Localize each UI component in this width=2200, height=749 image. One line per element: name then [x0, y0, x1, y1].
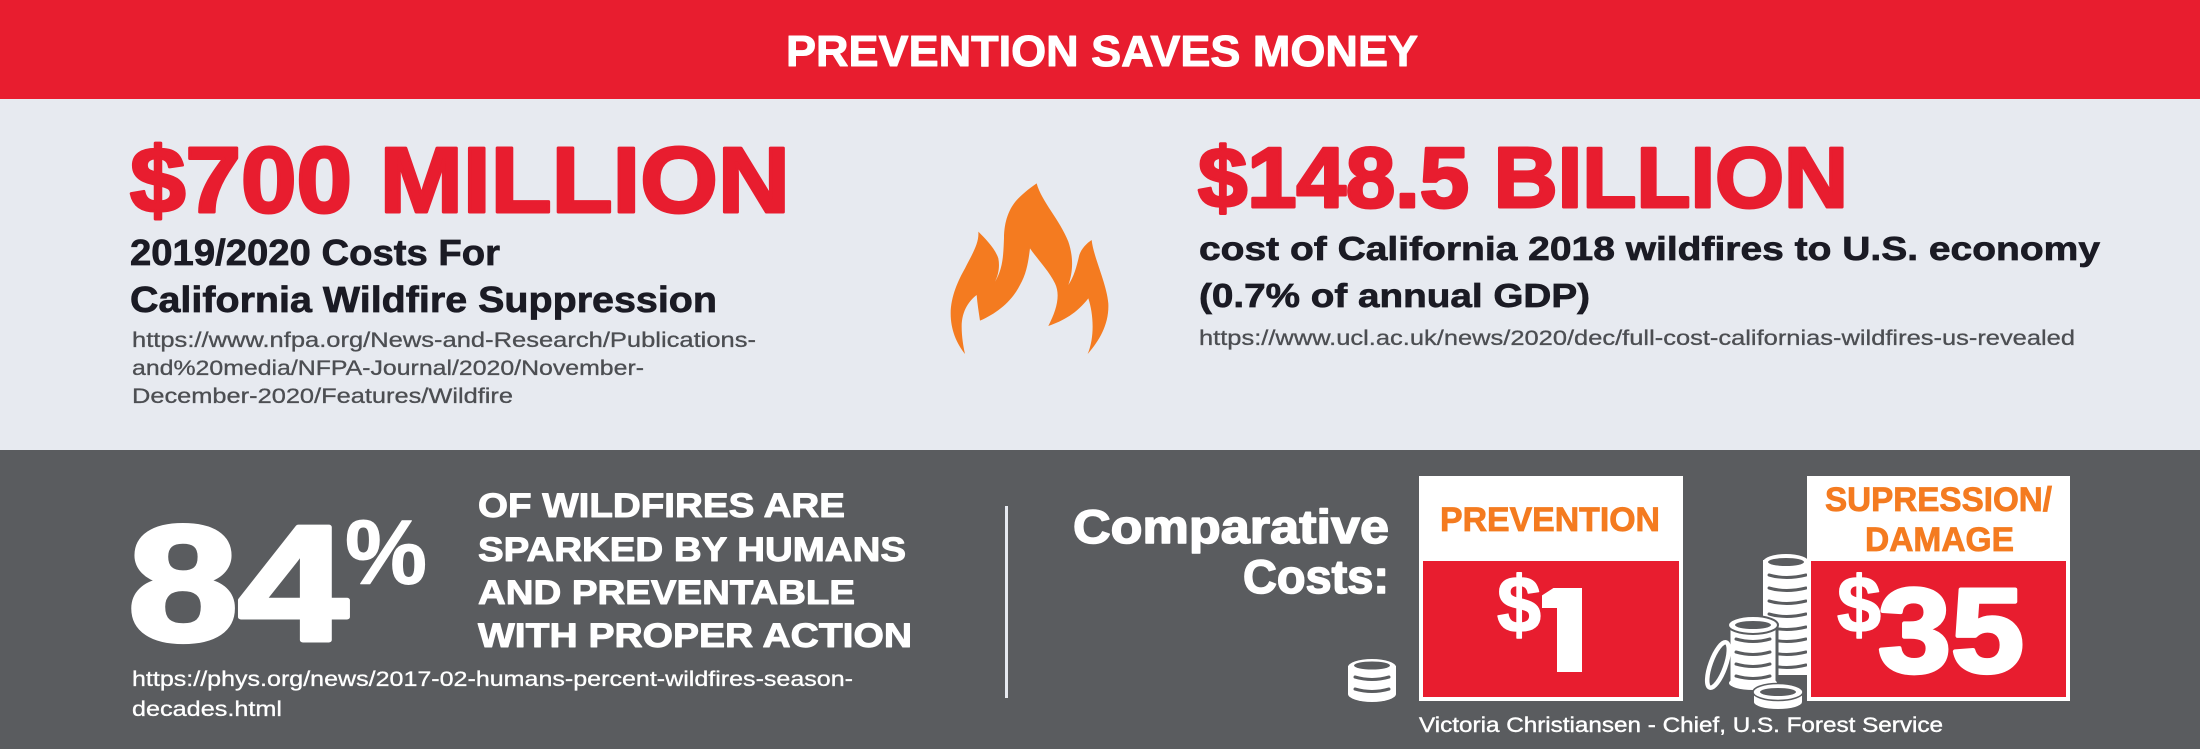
heading: economic cost [1199, 230, 2101, 314]
text: wildfires sparked by humans: WITH PROPER ACTION [478, 617, 912, 655]
icon: small coin stack [1348, 659, 1396, 702]
medium stack [1728, 616, 1778, 690]
attribution: Victoria Christiansen - Chief, U.S. Forest Service [1419, 714, 1943, 737]
stat: $148.5 billion: $148.5 BILLION [1198, 131, 1848, 226]
heading: economic cost: (0.7% of annual GDP) [1199, 277, 1590, 314]
tilted coin [1703, 640, 1733, 690]
source link: NFPA: and%20media/NFPA-Journal/2020/November- [132, 357, 644, 380]
panel: economic cost [1198, 131, 2101, 350]
heading: suppression costs: 2019/2020 Costs For [130, 232, 500, 273]
panel: dark background [0, 450, 2200, 749]
source link: NFPA [132, 329, 756, 408]
source link: phys.org: https://phys.org/news/2017-02-humans-percent-wildfires-season- [132, 668, 853, 691]
text: wildfires sparked by humans: SPARKED BY HUMANS [478, 531, 906, 569]
icon: flame [951, 183, 1108, 354]
card: suppression and damage [1807, 476, 2070, 701]
heading: comparative costs [1073, 500, 1389, 603]
panel: light background [0, 99, 2200, 450]
label: prevention: PREVENTION [1440, 501, 1660, 539]
source link: UCL: https://www.ucl.ac.uk/news/2020/dec/full-cost-californias-wildfires-us-revealed [1199, 327, 2075, 350]
source link: NFPA: https://www.nfpa.org/News-and-Research/Publications- [132, 329, 756, 352]
heading: comparative costs: Costs: [1243, 550, 1389, 603]
label: supression/damage: SUPRESSION/ [1825, 481, 2053, 519]
value: $35 [1837, 560, 2024, 698]
card: prevention [1419, 476, 1683, 701]
heading: suppression costs: California Wildfire Suppression [130, 279, 717, 320]
icon: large coin stacks [1703, 554, 1809, 709]
text: wildfires sparked by humans: OF WILDFIRES ARE [478, 487, 845, 525]
panel: suppression costs [130, 128, 790, 408]
value: $1: $ [1497, 560, 1541, 649]
value: $1 [1497, 572, 1582, 672]
label: supression/damage [1825, 481, 2053, 559]
tall stack [1763, 554, 1809, 675]
title banner: PREVENTION SAVES MONEY [786, 27, 1418, 76]
value: $1: 1 [1533, 562, 1601, 698]
stat: percent sign: % [345, 502, 427, 604]
value: $35: 35 [1878, 564, 2024, 698]
panel: 84 percent [128, 487, 912, 721]
label: supression/damage: DAMAGE [1865, 521, 2014, 559]
stat: $700 million: $700 MILLION [130, 128, 790, 232]
stat: 84: 84 [128, 492, 348, 675]
value: $35: $ [1837, 560, 1881, 649]
title banner [0, 0, 2200, 99]
source link: phys.org: decades.html [132, 698, 282, 721]
heading: suppression costs [130, 232, 717, 320]
heading: comparative costs: Comparative [1073, 500, 1389, 553]
text: wildfires sparked by humans: AND PREVENTABLE [478, 574, 855, 612]
heading: economic cost: cost of California 2018 wildfires to U.S. economy [1199, 230, 2101, 267]
flat coin [1753, 684, 1803, 709]
source link: phys.org [132, 668, 853, 721]
text: wildfires sparked by humans [478, 487, 912, 655]
source link: NFPA: December-2020/Features/Wildfire [132, 385, 513, 408]
